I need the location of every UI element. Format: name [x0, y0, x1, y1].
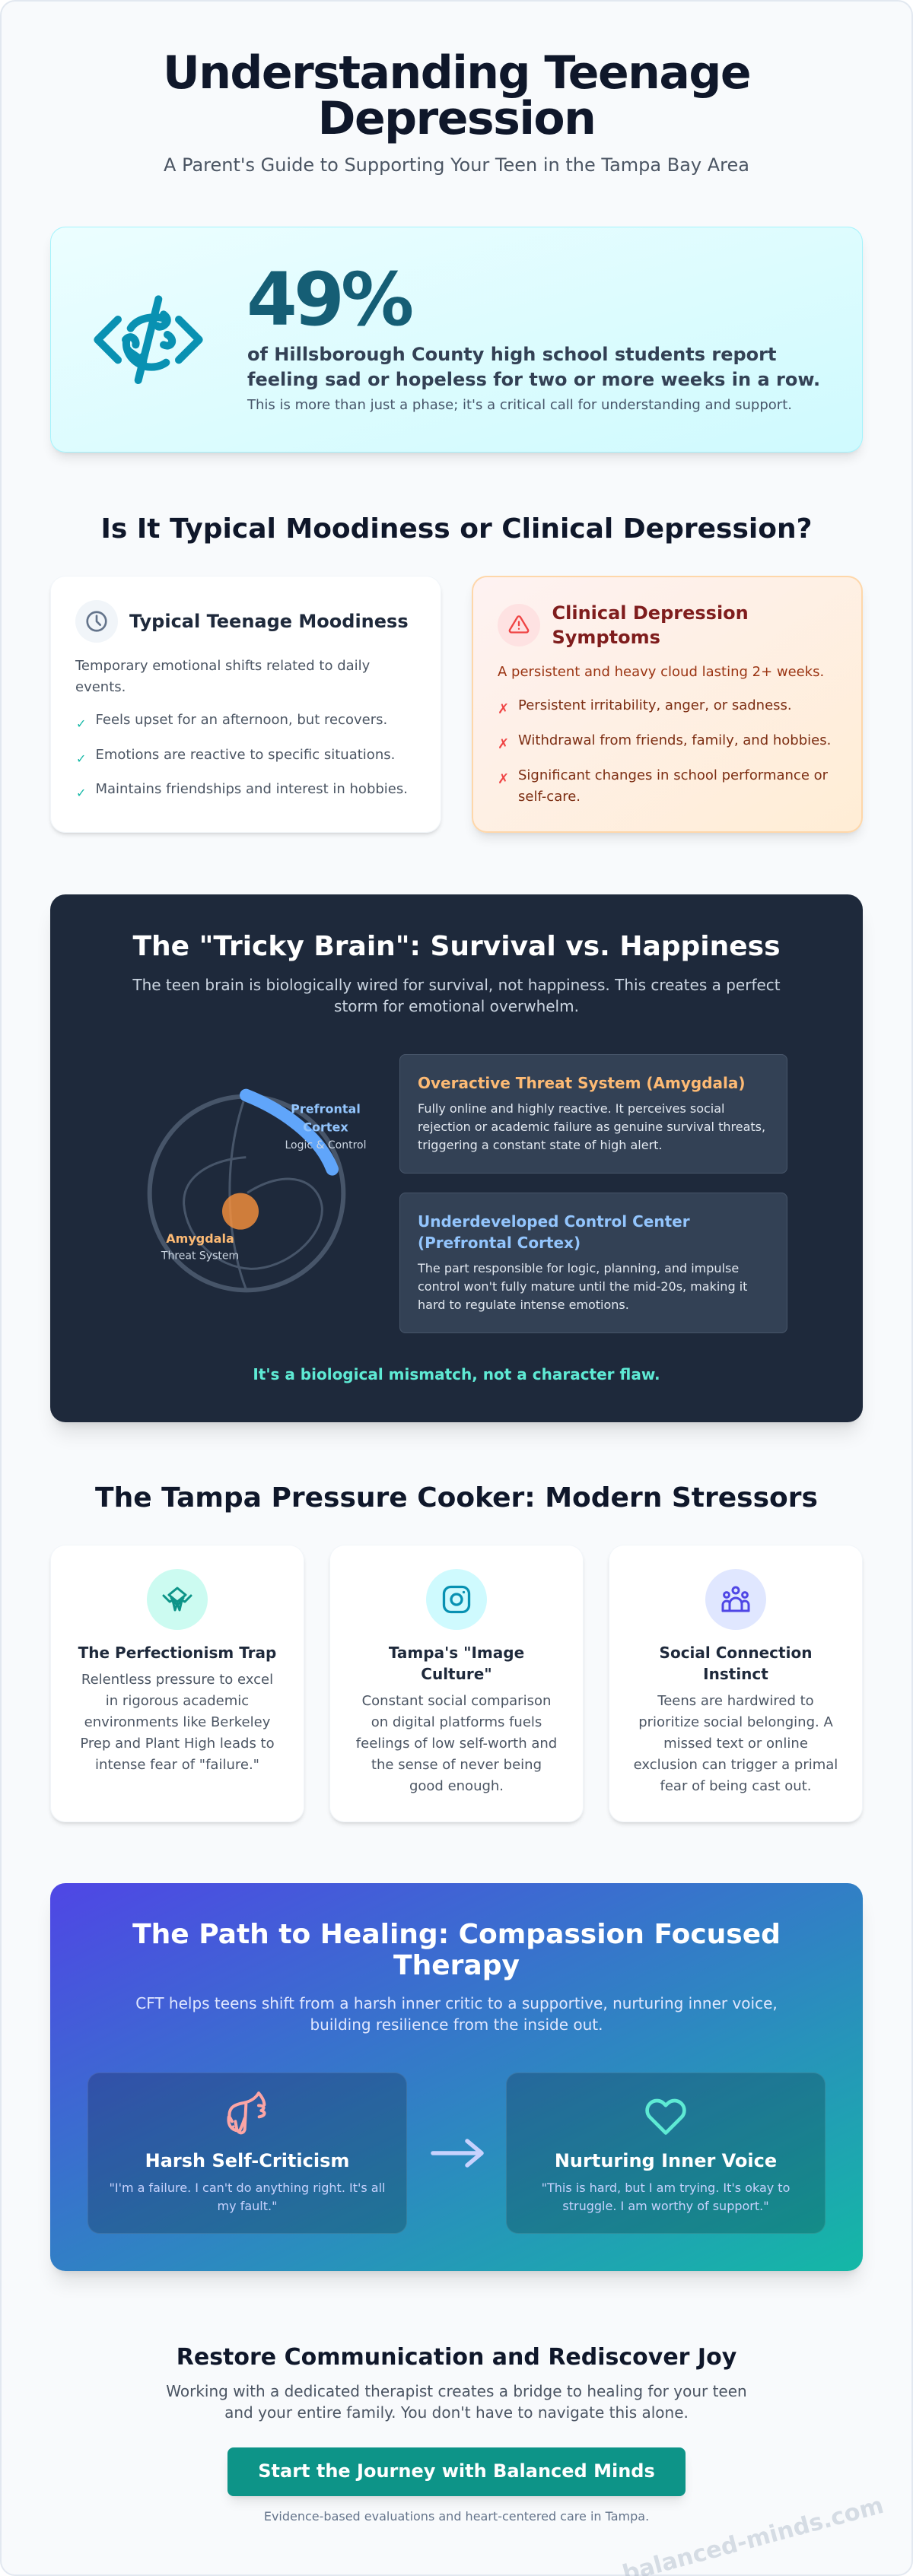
box: nurturing inner voice — [506, 2072, 826, 2234]
card intro — [75, 658, 370, 695]
icon: self-criticism — [227, 2092, 266, 2134]
intro text — [135, 1994, 778, 2034]
card title: Culture" — [421, 1665, 492, 1683]
callout: prefrontal cortex — [399, 1193, 787, 1333]
card title — [660, 1644, 812, 1683]
icon: eye with slash — [94, 295, 203, 384]
list item: ✓ — [76, 716, 86, 731]
box quote: my fault." — [218, 2198, 277, 2213]
callout heading: Underdeveloped Control Center — [418, 1212, 690, 1231]
icon: heart — [645, 2099, 686, 2135]
body text: and your entire family. You don't have to navigate this alone. — [224, 2403, 689, 2422]
intro text: CFT helps teens shift from a harsh inner critic to a supportive, nurturing inner voice, — [135, 1994, 778, 2012]
statistic description: feeling sad or hopeless for two or more weeks in a row. — [247, 368, 820, 389]
list item: ✓ — [76, 751, 86, 766]
footer statement: It's a biological mismatch, not a character flaw. — [253, 1365, 660, 1383]
panel: statistic — [50, 227, 863, 453]
card body — [80, 1672, 275, 1773]
card body: Relentless pressure to excel — [81, 1672, 273, 1688]
heading: The "Tricky Brain": Survival vs. Happiness — [132, 931, 781, 962]
card body: environments like Berkeley — [84, 1714, 270, 1730]
icon: perfectionism — [147, 1569, 208, 1630]
big number: 49% — [247, 257, 410, 342]
panel: perfectionism trap — [50, 1545, 304, 1822]
callout body: hard to regulate intense emotions. — [418, 1298, 629, 1312]
card title: Clinical Depression — [552, 602, 749, 624]
callout heading — [418, 1212, 690, 1252]
list item — [498, 767, 828, 805]
card title: Social Connection — [660, 1644, 812, 1662]
arrow — [431, 2139, 484, 2168]
box quote: "This is hard, but I am trying. It's okay to — [542, 2180, 790, 2195]
card body: intense fear of "failure." — [95, 1757, 259, 1773]
callout body: control won't fully mature until the mid-20s, making it — [418, 1279, 747, 1294]
button: Start the Journey with Balanced Minds — [258, 2460, 655, 2482]
icon: camera — [426, 1569, 487, 1630]
card title — [552, 602, 749, 648]
card title: Typical Teenage Moodiness — [129, 611, 409, 632]
list item: Maintains friendships and interest in hobbies. — [96, 781, 408, 797]
intro text — [132, 976, 781, 1015]
brain diagram: Cortex — [303, 1120, 348, 1135]
subtitle: A Parent's Guide to Supporting Your Teen in the Tampa Bay Area — [164, 154, 749, 176]
card body: exclusion can trigger a primal — [634, 1757, 838, 1773]
box quote: struggle. I am worthy of support." — [562, 2198, 769, 2213]
callout body: rejection or academic failure as genuine survival threats, — [418, 1120, 765, 1133]
callout body — [418, 1101, 765, 1151]
panel: path to healing — [50, 1883, 863, 2271]
box title: Harsh Self-Criticism — [145, 2149, 349, 2171]
card body: fear of being cast out. — [660, 1778, 811, 1794]
intro text: building resilience from the inside out. — [310, 2015, 603, 2034]
callout body — [417, 1261, 747, 1312]
brain diagram: Logic & Control — [285, 1139, 367, 1151]
card intro: events. — [75, 679, 126, 695]
title — [163, 46, 750, 145]
brain diagram — [148, 1089, 367, 1293]
statistic note: This is more than just a phase; it's a critical call for understanding and support. — [247, 397, 792, 413]
heading: modern stressors: The Tampa Pressure Cooker: Modern Stressors — [95, 1482, 818, 1514]
card title: Symptoms — [552, 627, 660, 648]
card body: feelings of low self-worth and — [356, 1736, 557, 1752]
card body: Constant social comparison — [362, 1693, 551, 1709]
card body — [634, 1693, 838, 1794]
list item: ✓ — [76, 786, 86, 800]
title: Depression — [318, 91, 595, 145]
card title: Instinct — [703, 1665, 768, 1683]
button — [227, 2447, 686, 2496]
box quote: "I'm a failure. I can't do anything right. It's all — [109, 2180, 385, 2195]
card intro: A persistent and heavy cloud lasting 2+ weeks. — [498, 664, 824, 680]
panel: social connection — [609, 1545, 863, 1822]
list item: ✗ — [498, 736, 509, 752]
brain diagram: Threat System — [161, 1250, 239, 1263]
card body: missed text or online — [663, 1736, 808, 1752]
panel: clinical depression symptoms — [472, 576, 863, 833]
callout: amygdala — [399, 1054, 787, 1174]
body text — [166, 2382, 747, 2422]
list item: Emotions are reactive to specific situations. — [96, 747, 395, 763]
box: harsh self-criticism — [87, 2072, 407, 2234]
heading: The Path to Healing: Compassion Focused — [132, 1918, 781, 1950]
brain diagram: Amygdala — [166, 1231, 234, 1246]
list item: Withdrawal from friends, family, and hobbies. — [518, 732, 831, 748]
panel: typical teenage moodiness — [50, 576, 441, 833]
card body: in rigorous academic — [106, 1693, 249, 1709]
small print: Evidence-based evaluations and heart-centered care in Tampa. — [264, 2509, 649, 2524]
body text: Working with a dedicated therapist creates a bridge to healing for your teen — [166, 2382, 747, 2400]
brain diagram: Prefrontal — [291, 1102, 361, 1116]
card body: prioritize social belonging. A — [638, 1714, 833, 1730]
statistic description — [247, 344, 820, 389]
statistic description: of Hillsborough County high school students report — [247, 344, 776, 365]
box quote — [109, 2180, 385, 2213]
icon: warning triangle — [498, 604, 540, 646]
callout heading: Overactive Threat System (Amygdala) — [418, 1074, 746, 1092]
card body: on digital platforms fuels — [371, 1714, 542, 1730]
icon: clock — [75, 600, 118, 643]
heading: moodiness vs depression: Is It Typical Moodiness or Clinical Depression? — [101, 513, 812, 545]
icon: people — [705, 1569, 766, 1630]
title: Understanding Teenage — [163, 46, 750, 100]
callout body: Fully online and highly reactive. It perceives social — [418, 1101, 724, 1115]
call to action — [166, 2344, 747, 2524]
card body — [356, 1693, 557, 1794]
heading — [132, 1918, 781, 1980]
card body: Teens are hardwired to — [657, 1693, 814, 1709]
list item: ✗ — [498, 701, 509, 717]
card title: The Perfectionism Trap — [78, 1644, 276, 1662]
card title: Tampa's "Image — [389, 1644, 524, 1662]
list item: ✗ — [498, 771, 509, 787]
box title: Nurturing Inner Voice — [555, 2149, 777, 2171]
header — [163, 46, 750, 176]
intro text: storm for emotional overwhelm. — [334, 997, 579, 1015]
card intro: Temporary emotional shifts related to daily — [75, 658, 370, 674]
list item: Significant changes in school performance or — [518, 767, 828, 783]
card body: the sense of never being — [371, 1757, 542, 1773]
callout heading: (Prefrontal Cortex) — [418, 1234, 581, 1252]
heading: Therapy — [393, 1950, 520, 1980]
card body: Prep and Plant High leads to — [80, 1736, 275, 1752]
card title — [388, 1644, 524, 1683]
panel: tricky brain — [50, 894, 863, 1422]
list item: Feels upset for an afternoon, but recovers. — [96, 712, 387, 728]
heading: Restore Communication and Rediscover Joy — [177, 2344, 736, 2371]
callout body: The part responsible for logic, planning, and impulse — [418, 1261, 739, 1275]
card body: good enough. — [409, 1778, 504, 1794]
box quote — [542, 2180, 790, 2213]
panel: image culture — [329, 1545, 584, 1822]
callout body: triggering a constant state of high alert. — [418, 1138, 663, 1151]
list item: Persistent irritability, anger, or sadness. — [518, 697, 792, 713]
list item: self-care. — [518, 789, 581, 805]
intro text: The teen brain is biologically wired for survival, not happiness. This creates a perfect — [132, 976, 781, 994]
